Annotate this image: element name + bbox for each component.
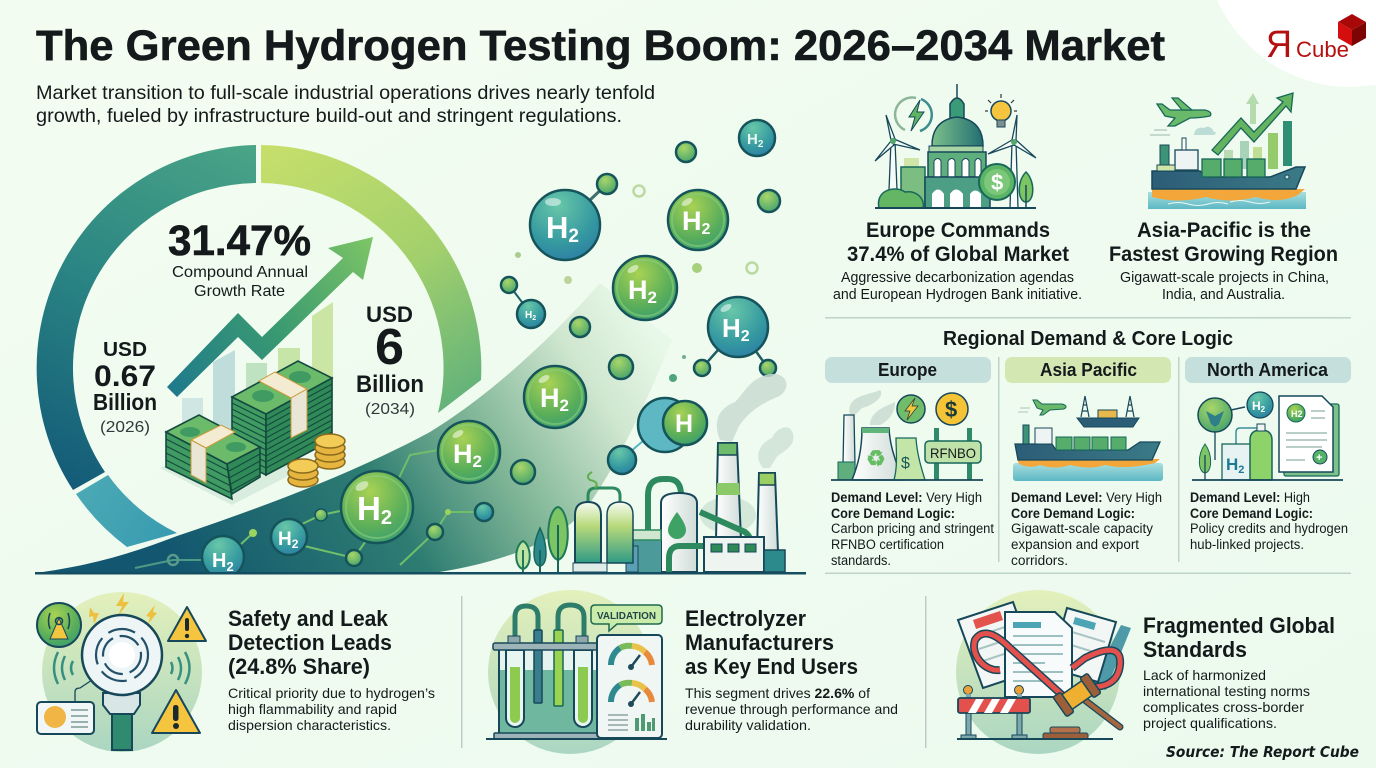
text: Europe description [833, 269, 1082, 303]
turbines [875, 115, 1036, 208]
icon: Europe capitol with turbines [875, 84, 1036, 208]
molecule: H2 mid: 2 [560, 396, 569, 415]
column: Asia Pacific [1005, 357, 1171, 568]
text: fragmented description [1143, 667, 1310, 731]
icon: North America policy: + [1316, 452, 1322, 464]
stat: USD 0.67 Billion 2026: (2026) [100, 419, 150, 436]
pill: North America [1185, 357, 1351, 383]
text: Europe demand [831, 490, 994, 568]
lightning cycle [895, 98, 916, 130]
network lines on swoosh [135, 450, 484, 568]
text: Europe demand: Carbon pricing and stringent [831, 521, 994, 536]
swoosh: rising hydrogen path [35, 283, 672, 573]
molecule: H2 top right [668, 190, 728, 250]
stat: USD 6 Billion 2034: 6 [375, 318, 404, 375]
main building [704, 537, 764, 572]
icon: North America policy: H [1226, 455, 1238, 474]
plane [1157, 104, 1211, 126]
heading: Europe: 37.4% of Global Market [847, 243, 1069, 266]
text: electrolyzer description [685, 685, 898, 733]
capitol [956, 84, 958, 98]
text: fragmented description: Lack of harmonized [1143, 667, 1266, 683]
icon: North America policy: 2 [1238, 464, 1244, 476]
middle paper [1005, 612, 1072, 697]
validation callout: VALIDATION [597, 610, 656, 622]
pole and neck [112, 712, 132, 750]
stacks [716, 443, 741, 540]
icon: money stacks and coins [160, 361, 345, 505]
ring: growth segment [261, 145, 481, 413]
H2 molecules rising [168, 120, 780, 578]
heading: electrolyzer: Manufacturers [685, 630, 834, 655]
tank [661, 493, 697, 572]
bridge [1175, 150, 1198, 170]
icon: North America policy: H2 [1291, 409, 1303, 419]
smoke [717, 374, 786, 442]
molecule: H2 blue with link: H [546, 210, 568, 245]
molecule: small nodes [168, 142, 780, 566]
stat: USD 0.67 Billion 2026: USD [103, 339, 147, 361]
sound waves [54, 652, 190, 684]
gavel [1043, 673, 1120, 739]
text: Asia Pacific demand: Gigawatt-scale capacity [1011, 521, 1153, 536]
heading: fragmented [1143, 613, 1335, 662]
CAGR callout: 31.47% [168, 217, 311, 265]
molecule: H2 small bottom left: 2 [226, 559, 234, 574]
CAGR callout [168, 217, 311, 300]
icon: Europe RFNBO plant [831, 390, 983, 480]
heading: Europe [847, 219, 1069, 266]
molecule: H2 swoosh: 2 [472, 452, 482, 471]
tubes [515, 606, 538, 640]
text: Asia Pacific demand: expansion and export [1011, 537, 1139, 552]
heading: Europe: Europe Commands [866, 219, 1050, 242]
validation callout [591, 605, 662, 631]
text: North America demand [1190, 490, 1348, 552]
containers [1202, 159, 1265, 177]
stat: USD 0.67 Billion 2026 [93, 339, 157, 436]
heading: safety [228, 606, 392, 679]
red tape [974, 633, 1120, 695]
text: fragmented description: project qualifications. [1143, 715, 1277, 731]
baseline [35, 572, 806, 574]
molecule: H2 lower: 2 [292, 537, 299, 551]
text: Europe demand: standards. [831, 553, 891, 568]
subtitle [36, 82, 655, 127]
coin [979, 164, 1015, 200]
stat: USD 0.67 Billion 2026: 0.67 [94, 360, 156, 393]
tanks with pipe [588, 488, 620, 502]
molecule: decorative dots [515, 186, 758, 382]
text: fragmented description: complicates cross-border [1143, 699, 1304, 715]
barrier [958, 686, 1030, 739]
pill: Asia Pacific: Asia Pacific [1040, 360, 1137, 380]
text: Asia Pacific demand: Demand Level: Very High [1011, 490, 1162, 505]
water [1013, 463, 1163, 481]
title: The Green Hydrogen Testing Boom: 2026–2034 Market [36, 22, 1165, 70]
panel: Fragmented global standards [956, 590, 1335, 754]
text: electrolyzer description: This segment drives 22.6% of [685, 685, 870, 701]
text: Europe demand: Demand Level: Very High [831, 490, 982, 505]
icon: Europe capitol with turbines: $ [991, 170, 1003, 195]
molecule: H2 tiny: H [525, 310, 532, 321]
panel: Safety and leak detection [37, 592, 435, 752]
text: Asia Pacific demand: Core Demand Logic: [1011, 506, 1135, 521]
icon: hydrogen leak sensor [37, 592, 206, 752]
molecule: H2 mid: H [540, 383, 560, 413]
icon: factory [516, 374, 793, 572]
alert card [75, 680, 92, 702]
molecule: H2 green centre: 2 [648, 288, 657, 307]
coins [288, 434, 345, 487]
column: Europe [825, 357, 994, 568]
icon: electrolyzer test rig [486, 590, 667, 754]
hull [1152, 189, 1305, 200]
tall stack [232, 361, 332, 475]
molecule: H2 blue with link [530, 174, 617, 260]
molecule: H2 tiny [501, 277, 545, 328]
pill: Europe [825, 357, 991, 383]
icon: Europe RFNBO plant: $ [901, 455, 910, 472]
heading: electrolyzer: as Key End Users [685, 654, 858, 679]
CAGR callout: Compound Annual [172, 264, 308, 281]
heading: electrolyzer: Electrolyzer [685, 606, 806, 631]
icon: North America policy [1192, 392, 1343, 480]
molecule: H2 tiny: 2 [532, 315, 536, 322]
bars [1224, 121, 1292, 170]
stat: USD 6 Billion 2034: Billion [356, 371, 424, 398]
heading: electrolyzer [685, 606, 858, 679]
pipes [648, 479, 681, 555]
icon: North America policy: 2 [1261, 405, 1266, 414]
stat: USD 6 Billion 2034 [356, 302, 424, 418]
molecule: H2 blue with link: 2 [568, 226, 579, 247]
text: Europe description: Aggressive decarbonization agendas [841, 269, 1074, 286]
pill: North America: North America [1207, 360, 1329, 380]
column: North America [1185, 357, 1351, 552]
molecule: H2 large [341, 471, 413, 543]
pill: Europe: Europe [878, 360, 937, 380]
molecule: H2 large: 2 [381, 507, 392, 529]
stat: USD 6 Billion 2034: USD [366, 302, 413, 327]
icon: North America policy: H [1252, 399, 1261, 413]
gauge panel [597, 635, 662, 738]
text: fragmented description: international testing norms [1143, 683, 1310, 699]
small ship [1081, 396, 1134, 417]
text: Europe description: and European Hydrogen Bank initiative. [833, 286, 1082, 303]
icon: documents, red tape and gavel [956, 590, 1131, 754]
panel: Asia-Pacific highlight [1109, 93, 1338, 303]
heading: Asia-Pacific [1109, 219, 1338, 266]
bulb [991, 101, 1011, 121]
molecule: H2 blue with two atoms [694, 297, 776, 376]
right paper [1090, 625, 1131, 690]
molecule: H2 corner: H [747, 131, 758, 148]
text: Asia-Pacific description: India, and Australia. [1162, 286, 1285, 303]
text: North America demand: hub-linked projects. [1190, 537, 1304, 552]
text: safety description: high flammability and rapid [228, 701, 397, 717]
arrow [1212, 93, 1293, 155]
text: North America demand: Demand Level: High [1190, 490, 1310, 505]
heading: fragmented: Standards [1143, 637, 1247, 662]
molecule: H2 small bottom left [202, 536, 244, 578]
text: safety description: dispersion characteristics. [228, 717, 391, 733]
text: Asia Pacific demand [1011, 490, 1162, 568]
text: Europe demand: Core Demand Logic: [831, 506, 955, 521]
arrow: growth zigzag [167, 237, 373, 397]
molecule: H2 green centre [613, 256, 677, 320]
heading: fragmented: Fragmented Global [1143, 613, 1335, 638]
icon: Europe RFNBO plant: ♻ [866, 446, 886, 471]
text: North America demand: Core Demand Logic: [1190, 506, 1313, 521]
text: North America demand: Policy credits and hydrogen [1190, 521, 1348, 536]
molecule: H2 swoosh: H [453, 439, 472, 469]
text: Europe demand: RFNBO certification [831, 537, 944, 552]
warning triangles [152, 607, 206, 733]
panel: growth ring chart [37, 145, 481, 547]
trees [516, 541, 530, 569]
molecule: H2 corner [739, 120, 775, 156]
heading: Asia-Pacific: Asia-Pacific is the [1137, 219, 1311, 242]
subtitle: growth, fueled by infrastructure build-out and stringent regulations. [36, 105, 622, 127]
molecule: H2 top right: H [682, 206, 702, 236]
molecule: splitting H [608, 398, 707, 474]
molecule: H2 blue with two atoms: H [722, 313, 741, 343]
heading: safety: Safety and Leak [228, 606, 389, 631]
heading: Regional Demand & Core Logic: Regional Demand & Core Logic [943, 328, 1233, 350]
heading: Asia-Pacific: Fastest Growing Region [1109, 243, 1338, 266]
text: safety description: Critical priority due to hydrogen’s [228, 685, 435, 701]
ring: 2026 base segment [37, 145, 256, 490]
ring: lower teal segment [76, 475, 177, 547]
molecule: H2 corner: 2 [758, 139, 764, 150]
tree [1019, 172, 1033, 202]
up arrow [1246, 93, 1259, 124]
molecule: H2 large: H [357, 490, 381, 527]
left paper [958, 602, 1037, 688]
molecule: H2 swoosh [438, 421, 500, 483]
text: electrolyzer description: durability validation. [685, 717, 811, 733]
head [82, 615, 162, 695]
radio badge [37, 603, 81, 647]
text: Asia-Pacific description [1120, 269, 1329, 303]
pill: Asia Pacific [1005, 357, 1171, 383]
icon: cargo ship with growth arrow [1148, 93, 1306, 209]
panel: Europe highlight [833, 84, 1082, 303]
text: Asia Pacific demand: corridors. [1011, 553, 1068, 568]
molecule: H2 lower: H [278, 529, 292, 550]
molecule: splitting H: H [675, 410, 693, 438]
short stack [166, 415, 260, 499]
molecule: H2 top right: 2 [702, 221, 710, 238]
icon: Europe RFNBO plant: RFNBO [930, 445, 976, 461]
molecule: H2 lower [271, 519, 307, 555]
logo: RCube [1217, 0, 1376, 87]
molecule: H2 small bottom left: H [212, 550, 226, 572]
panel: Electrolyzer manufacturers [486, 590, 898, 754]
chart: background growth bars [182, 302, 333, 458]
text: Asia-Pacific description: Gigawatt-scale projects in China, [1120, 269, 1329, 286]
source note: Source: The Report Cube [1166, 743, 1359, 761]
subtitle: Market transition to full-scale industrial operations drives nearly tenfold [36, 82, 655, 104]
heading: safety: (24.8% Share) [228, 654, 370, 679]
molecule: H2 mid [524, 366, 586, 428]
stat: USD 0.67 Billion 2026: Billion [93, 389, 157, 415]
icon: Asia Pacific ships [1013, 396, 1163, 481]
small building and bush [904, 158, 919, 168]
molecule: H2 blue with two atoms: 2 [741, 328, 750, 345]
text: safety description [228, 685, 435, 733]
CAGR callout: Growth Rate [194, 283, 285, 300]
water [1148, 192, 1306, 209]
logo: RCube: Я [1266, 24, 1292, 66]
icon: Europe RFNBO plant: $ [945, 397, 957, 422]
heading: safety: Detection Leads [228, 630, 392, 655]
cloud and speed lines [1194, 127, 1216, 135]
logo: RCube: Cube [1296, 37, 1349, 62]
molecule: H2 green centre: H [628, 275, 648, 305]
text: electrolyzer description: revenue through performance and [685, 701, 898, 717]
stat: USD 6 Billion 2034: (2034) [365, 401, 415, 418]
